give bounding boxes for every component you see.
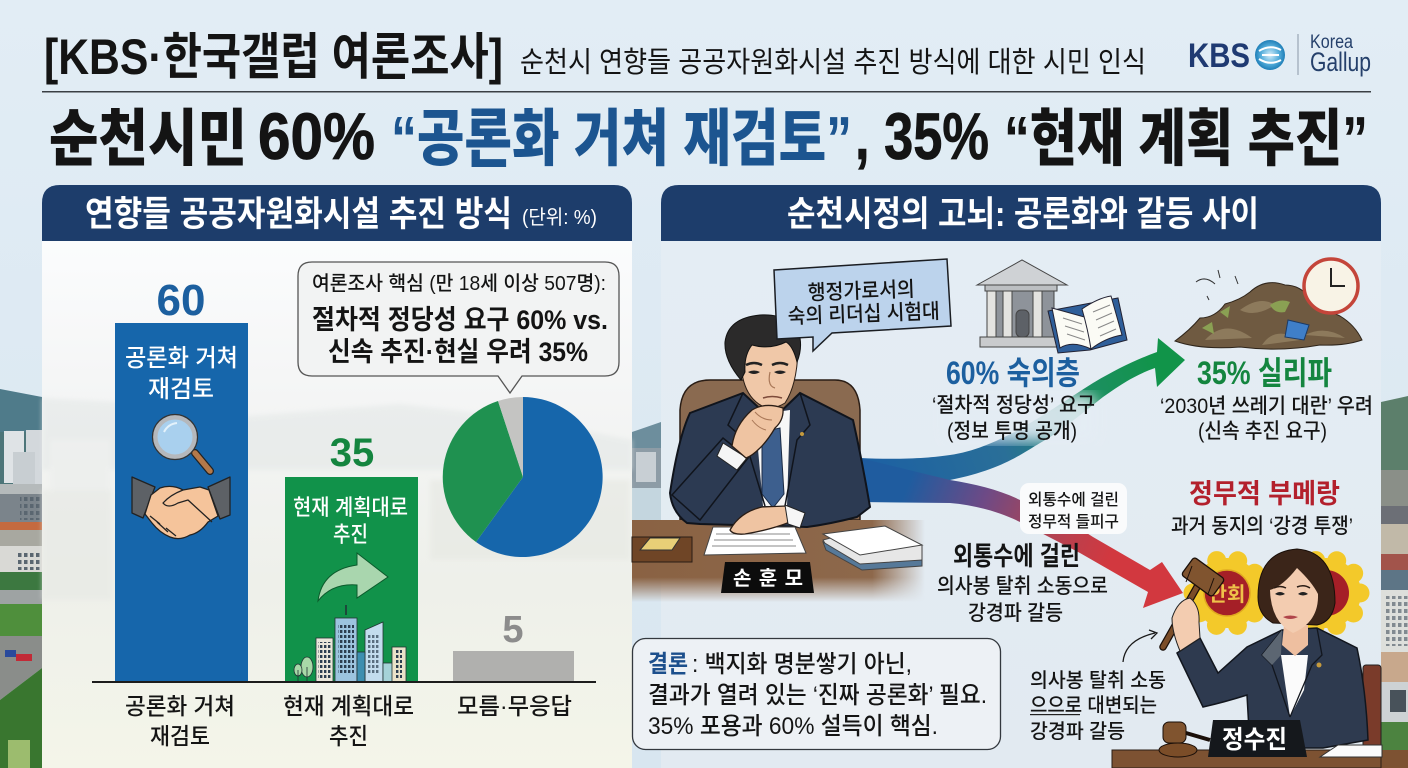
bar: 35: 추진 [333,522,368,547]
icon: open book [1048,296,1127,353]
chair [680,380,860,520]
illustration: mayor candidate Son Hun-mo [632,315,932,602]
survey subtitle: 순천시 연향들 공공자원화시설 추진 방식에 대한 시민 인식 [520,46,1146,79]
head and hair [741,330,798,408]
left panel background [42,241,632,768]
callout: conclusion: 35% 포용과 60% 설득이 핵심. [648,713,938,740]
text: 60% deliberation group [932,355,1095,443]
text: 60% deliberation group: 60% 숙의층 [946,355,1080,391]
arrow: blue to red [860,458,1183,608]
speech bubble [774,259,951,351]
raised arm and hand [672,438,748,520]
label: political deadlock: 외통수에 걸린 [1028,491,1119,509]
speech bubble: 행정가로서의 [807,278,915,305]
survey label heading: [KBS·한국갤럽 여론조사] [44,29,503,85]
lower hand [730,506,790,534]
icon: clock [1304,259,1358,313]
main title: “공론화 거쳐 재검토” [391,105,852,174]
callout: conclusion: 결론 [648,651,688,678]
nameplate: 정수진 [1208,720,1307,757]
gavel raised [1163,557,1225,647]
text: 60% deliberation group: ‘절차적 정당성’ 요구 [932,394,1095,417]
main title: , 35% [855,99,989,173]
text: gavel annotation [1030,669,1166,743]
bar: 35 [285,431,418,682]
bar: 35: 35 [330,431,374,475]
illustration: council chair Jeong Su-jin [1112,549,1382,768]
text: deadlock explanation [937,541,1108,625]
text: 35% pragmatic group: 35% 실리파 [1197,355,1332,391]
bar label: 모름·무응답: 모름·무응답 [457,693,572,719]
nameplate: 손훈모 [721,562,814,593]
bar: 60: 60 [157,276,205,325]
left panel heading: (단위: %) [522,206,597,229]
raised hand [1172,598,1200,651]
bar chart [92,276,596,749]
bar label: 공론화 거쳐 재검토 [125,693,235,749]
text: 35% pragmatic group: (신속 추진 요구) [1198,420,1327,443]
text: 60% deliberation group: (정보 투명 공개) [947,420,1077,443]
panel: Suncheon city dilemma [632,185,1382,768]
text: gavel annotation: 강경파 갈등 [1030,720,1125,743]
main title [49,99,1368,174]
papers [704,526,922,570]
nameplate: 손훈모: 손 훈 모 [733,567,803,590]
bar: 60: 재검토 [148,376,214,403]
arrow: blue to green [860,338,1185,502]
icon: government building [977,260,1067,347]
pie chart [443,397,603,557]
icon: magnifying glass [152,414,210,471]
desk [1112,745,1382,768]
text: deadlock explanation: 의사봉 탈취 소동으로 [937,575,1108,598]
callout: poll key point: 신속 추진·현실 우려 35% [328,337,588,367]
bar: 5: 5 [502,609,524,651]
right panel background [661,241,1381,768]
speech bubble: 숙의 리더십 시험대 [787,300,940,329]
desk tray [632,537,692,562]
main title: 60% [258,99,375,173]
callout: conclusion [632,638,1000,750]
glow behind deliberation text [945,395,1095,441]
arrow: gavel annotation [1123,630,1157,662]
bar: 60: 공론화 거쳐 [125,345,238,372]
text: gavel annotation: 의사봉 탈취 소동 [1030,669,1166,692]
council emblem right [1291,558,1361,628]
main title: 순천시민 [49,105,247,174]
logo: Korea Gallup: Gallup [1310,47,1371,77]
text: political boomerang: 정무적 부메랑 [1189,479,1340,509]
icon: forward arrow [318,553,388,601]
suit [1177,628,1368,748]
bar label: 공론화 거쳐 재검토: 공론화 거쳐 [125,693,235,719]
text: 35% pragmatic group: ‘2030년 쓰레기 대란’ 우려 [1160,395,1373,418]
right panel heading: 순천시정의 고뇌: 공론화와 갈등 사이 [787,195,1259,234]
right panel heading [661,185,1381,241]
callout: poll key point [298,262,619,393]
text: political boomerang: 과거 동지의 ‘강경 투쟁’ [1171,515,1353,538]
callout: poll key point: 여론조사 핵심 (만 18세 이상 507명): [312,272,606,295]
logo: Korea Gallup [1298,32,1371,77]
callout: poll key point: 절차적 정당성 요구 60% vs. [312,305,608,335]
bar: 5 [453,609,574,682]
callout: conclusion: 결과가 열려 있는 ‘진짜 공론화’ 필요. [648,682,987,709]
text: 35% pragmatic group [1160,355,1373,443]
icon: garbage pile [1175,270,1362,349]
logo: Korea Gallup: Korea [1310,32,1353,53]
text: gavel annotation: 으으로 대변되는 [1030,694,1157,717]
suit [670,393,870,527]
hair and face [1258,549,1335,625]
header row [42,29,1371,92]
text: political boomerang [1171,479,1353,538]
desk [632,520,932,602]
council emblem left: 안회 [1209,583,1245,606]
logo: KBS: KBS [1188,37,1250,75]
bar label: 현재 계획대로 추진: 추진 [329,723,368,749]
icon: city buildings [294,605,406,682]
chair [1363,665,1381,747]
label: political deadlock: 정무적 들피구 [1028,513,1119,531]
council emblem left [1192,558,1262,628]
desk gavel [1159,722,1210,757]
bar label: 공론화 거쳐 재검토: 재검토 [150,723,210,749]
nameplate: 정수진: 정수진 [1222,726,1287,754]
left panel heading [42,185,632,241]
label: political deadlock [1020,483,1127,534]
bar: 35: 현재 계획대로 [293,495,408,520]
text: deadlock explanation: 외통수에 걸린 [953,541,1080,571]
left panel heading: 연향들 공공자원화시설 추진 방식 [85,195,512,234]
bar label: 현재 계획대로 추진 [283,693,414,749]
text: deadlock explanation: 강경파 갈등 [968,602,1063,625]
icon: handshake [132,477,230,539]
bar label: 현재 계획대로 추진: 현재 계획대로 [283,693,414,719]
bar: 60 [115,276,248,682]
callout: conclusion: : 백지화 명분쌓기 아닌, [692,651,912,678]
panel: poll results [42,185,632,768]
